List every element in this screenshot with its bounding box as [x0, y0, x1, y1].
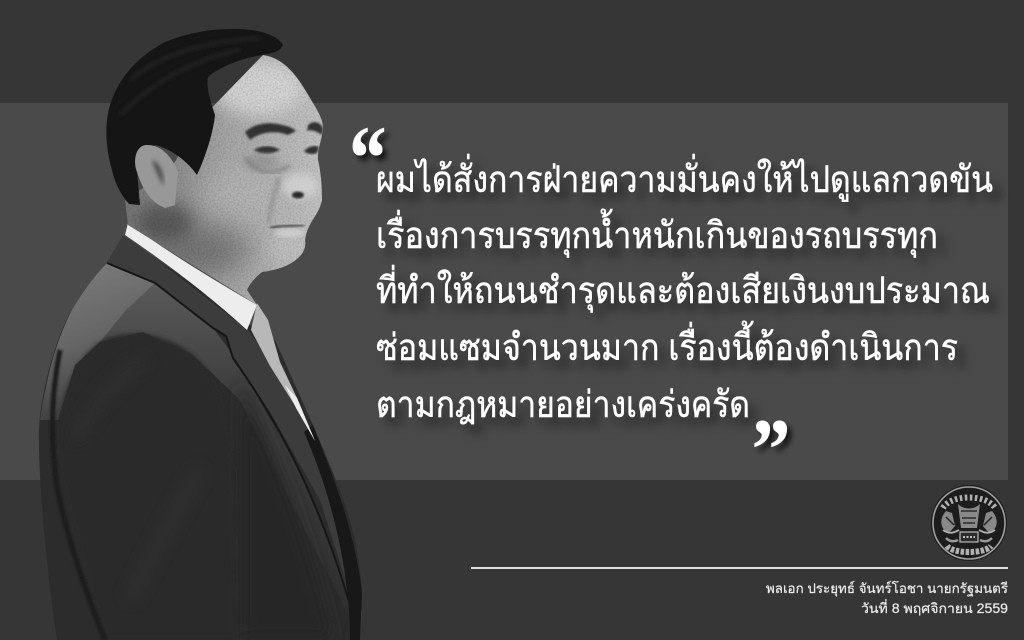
attribution [766, 580, 1008, 616]
portrait photo [30, 29, 370, 640]
attribution: พลเอก ประยุทธ์ จันทร์โอชา นายกรัฐมนตรี [766, 580, 1008, 597]
hair [106, 29, 283, 205]
opening quote mark: “ [345, 107, 385, 209]
eyes [254, 146, 280, 153]
ear [135, 145, 178, 208]
nose and mouth [282, 173, 318, 199]
divider line [471, 567, 1008, 569]
panel: quote band [0, 103, 1008, 480]
neck and face [120, 50, 330, 310]
icon: government seal [931, 485, 1007, 561]
closing quote mark: ” [747, 401, 788, 499]
quote text: เรื่องการบรรทุกน้ำหนักเกินของรถบรรทุก [376, 208, 938, 258]
quote text [376, 153, 993, 425]
quote text: ตามกฎหมายอย่างเคร่งครัด [376, 384, 750, 425]
brows [245, 123, 296, 140]
shirt collar [125, 223, 257, 330]
necktie [251, 303, 315, 441]
lapel [107, 235, 370, 640]
jacket [30, 225, 370, 640]
attribution: วันที่ 8 พฤศจิกายน 2559 [861, 599, 1008, 616]
